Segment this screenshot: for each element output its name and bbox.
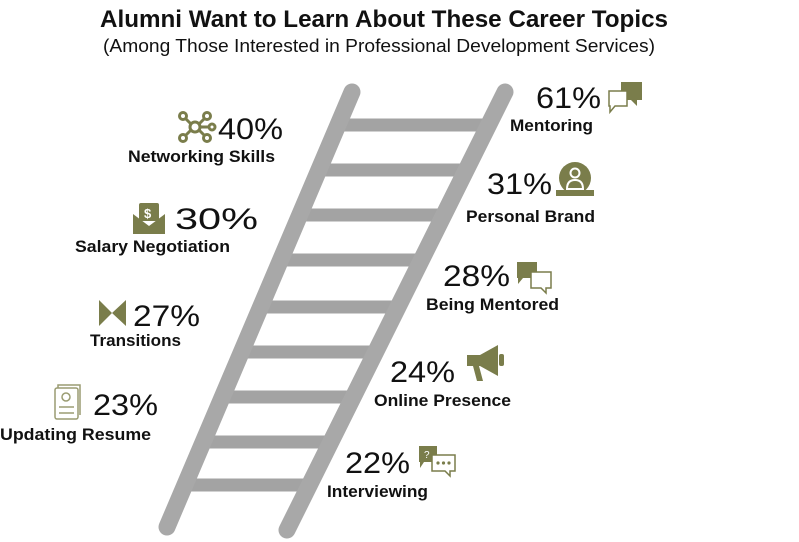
- item: salary negotiation: Salary Negotiation: [75, 237, 230, 256]
- item: interviewing: Interviewing: [327, 482, 428, 501]
- item: mentoring: Mentoring: [510, 116, 593, 135]
- item: transitions: Transitions: [90, 331, 181, 350]
- item: being mentored: 28%: [443, 260, 510, 293]
- item: networking skills: 40%: [218, 113, 283, 146]
- item: mentoring: 61%: [536, 82, 601, 115]
- icon: question chat: ?: [424, 450, 430, 461]
- icon: chat bubbles: [517, 262, 551, 293]
- icon: person badge: [556, 162, 594, 196]
- item: updating resume: [0, 385, 158, 444]
- ladder: [167, 92, 505, 530]
- icon: network: [180, 112, 215, 142]
- item: salary negotiation: 30%: [175, 203, 258, 236]
- icon: bowtie: [99, 300, 126, 326]
- item: interviewing: 22%: [345, 447, 410, 480]
- item: personal brand: Personal Brand: [466, 207, 595, 226]
- icon: salary envelope: $: [144, 206, 152, 221]
- item: transitions: [90, 300, 200, 350]
- item: mentoring: [510, 82, 642, 135]
- item: being mentored: Being Mentored: [426, 295, 559, 314]
- icon: chat bubbles: [609, 82, 642, 112]
- item: personal brand: [466, 162, 595, 226]
- item: interviewing: [327, 446, 455, 501]
- item: networking skills: Networking Skills: [128, 147, 275, 166]
- item: online presence: 24%: [390, 356, 455, 389]
- item: personal brand: 31%: [487, 168, 552, 201]
- subtitle: (Among Those Interested in Professional Development Services): [103, 36, 655, 56]
- icon: resume: [55, 385, 80, 419]
- item: updating resume: 23%: [93, 389, 158, 422]
- icon: megaphone: [467, 345, 504, 381]
- item: updating resume: Updating Resume: [0, 425, 151, 444]
- item: online presence: Online Presence: [374, 391, 511, 410]
- item: online presence: [374, 345, 511, 410]
- title: Alumni Want to Learn About These Career Topics: [100, 6, 668, 33]
- item: salary negotiation: [75, 203, 258, 256]
- icon: salary envelope: [133, 203, 165, 234]
- item: networking skills: [128, 112, 283, 166]
- item: transitions: 27%: [133, 300, 200, 333]
- item: being mentored: [426, 260, 559, 314]
